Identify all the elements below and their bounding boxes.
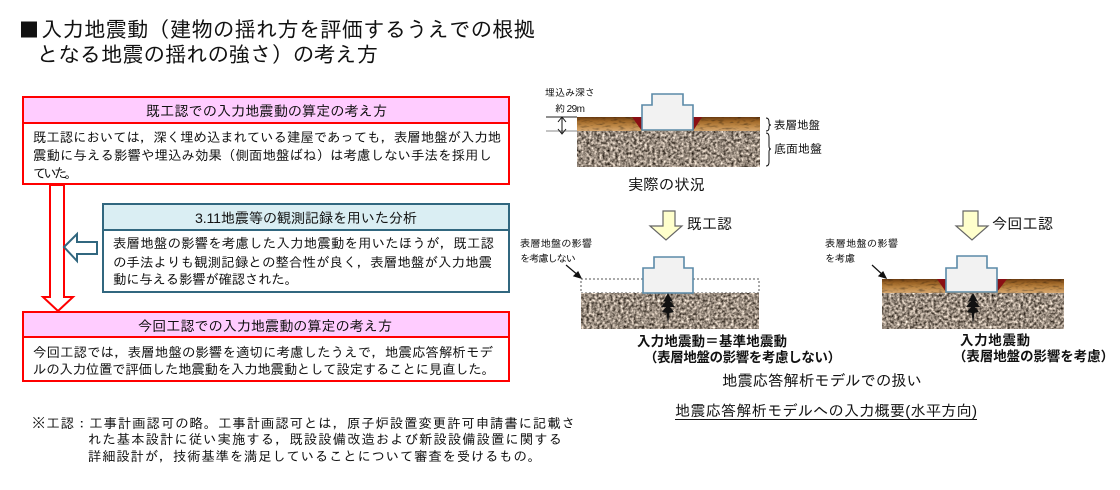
text: 3.11 analysis: 動に与える影響が確認された。 — [113, 272, 298, 287]
panel: 3.11 analysis — [103, 204, 509, 292]
diagram: current method model — [825, 238, 1114, 364]
panel: previous method — [23, 97, 509, 184]
seismic arrow — [661, 293, 675, 324]
layer labels: 底面地盤 — [774, 142, 822, 156]
panel: current method — [23, 312, 509, 381]
footnote: ※工認：工事計画認可の略。工事計画認可とは，原子炉設置変更許可申請書に記載さ — [32, 416, 575, 431]
layer labels: 表層地盤 — [774, 119, 820, 132]
title: 入力地震動（建物の揺れ方を評価するうえでの根拠 — [41, 18, 535, 42]
arrow: to previous method — [650, 211, 682, 240]
diagram: actual situation — [545, 87, 822, 194]
footnote — [32, 416, 575, 464]
seismic arrow — [966, 293, 980, 324]
text: previous method: 既工認においては，深く埋め込まれている建屋であっても，表層地盤が入力地 — [33, 130, 501, 145]
text: current method: 今回工認では，表層地盤の影響を適切に考慮したうえで，地震応答解析モデ — [33, 345, 494, 360]
note — [825, 238, 898, 265]
text: current method: ルの入力位置で評価した地震動を入力地震動として設定することに見直した。 — [33, 362, 495, 377]
dashed surface outline — [581, 279, 759, 293]
text: previous method: 震動に与える影響や埋込み効果（側面地盤ばね）は考慮しない手法を採用し — [33, 148, 492, 163]
text: previous method — [33, 130, 501, 181]
arrow: to current method — [956, 211, 988, 240]
note: を考慮 — [825, 253, 855, 265]
pointer — [872, 265, 886, 278]
heading: 3.11 analysis: 3.11地震等の観測記録を用いた分析 — [195, 210, 417, 227]
text: 3.11 analysis: の手法よりも観測記録との整合性が良く，表層地盤が入力地震 — [113, 255, 492, 270]
note: 表層地盤の影響 — [825, 238, 898, 250]
footnote: 詳細設計が，技術基準を満足していることについて審査を受けるもの。 — [88, 449, 541, 464]
building — [643, 257, 693, 293]
text: previous method: ていた。 — [33, 166, 78, 181]
bedrock layer — [882, 293, 1064, 329]
note: 表層地盤の影響 — [520, 238, 592, 250]
text: 3.11 analysis: 表層地盤の影響を考慮した入力地震動を用いたほうが，既工認 — [113, 236, 495, 251]
seismic label: 入力地震動 — [960, 332, 1030, 348]
title: ■ — [19, 14, 39, 43]
embedment depth — [545, 87, 595, 134]
seismic label: （表層地盤の影響を考慮しない） — [644, 349, 841, 365]
side wedges — [937, 279, 1007, 292]
caption: model treatment: 地震応答解析モデルでの扱い — [722, 373, 922, 390]
text: 3.11 analysis — [113, 236, 495, 287]
arrow: teal left — [64, 234, 97, 261]
side wedges — [632, 117, 702, 131]
caption: 実際の状況 — [628, 177, 705, 194]
embedment depth: 約 29m — [555, 103, 585, 115]
surface layer — [882, 279, 1064, 293]
pointer — [566, 265, 581, 278]
layer labels — [774, 119, 822, 156]
arrow: red down — [43, 185, 73, 311]
text: current method — [33, 345, 495, 377]
seismic label — [953, 332, 1114, 364]
footnote: れた基本設計に従い実施する，既設設備改造および新設設備設置に関する — [88, 432, 562, 447]
seismic label: 入力地震動＝基準地震動 — [637, 333, 787, 349]
heading: current method: 今回工認での入力地震動の算定の考え方 — [138, 319, 392, 335]
bedrock layer — [581, 293, 759, 329]
building — [642, 94, 693, 130]
note — [520, 238, 592, 265]
bedrock layer — [577, 131, 760, 167]
title: となる地震の揺れの強さ）の考え方 — [37, 43, 378, 67]
note: を考慮しない — [520, 253, 576, 265]
label: current method: 今回工認 — [992, 216, 1053, 233]
surface layer — [577, 117, 760, 131]
seismic label — [637, 333, 841, 365]
braces — [766, 118, 771, 166]
seismic label: （表層地盤の影響を考慮） — [953, 348, 1114, 364]
embedment depth: 埋込み深さ — [545, 87, 595, 99]
heading: previous method: 既工認での入力地震動の算定の考え方 — [146, 104, 387, 120]
caption: model input overview: 地震応答解析モデルへの入力概要(水平方向) — [675, 403, 977, 420]
building — [946, 256, 997, 292]
label: previous method: 既工認 — [687, 216, 732, 233]
title — [19, 14, 535, 67]
diagram: previous method model — [520, 238, 841, 365]
